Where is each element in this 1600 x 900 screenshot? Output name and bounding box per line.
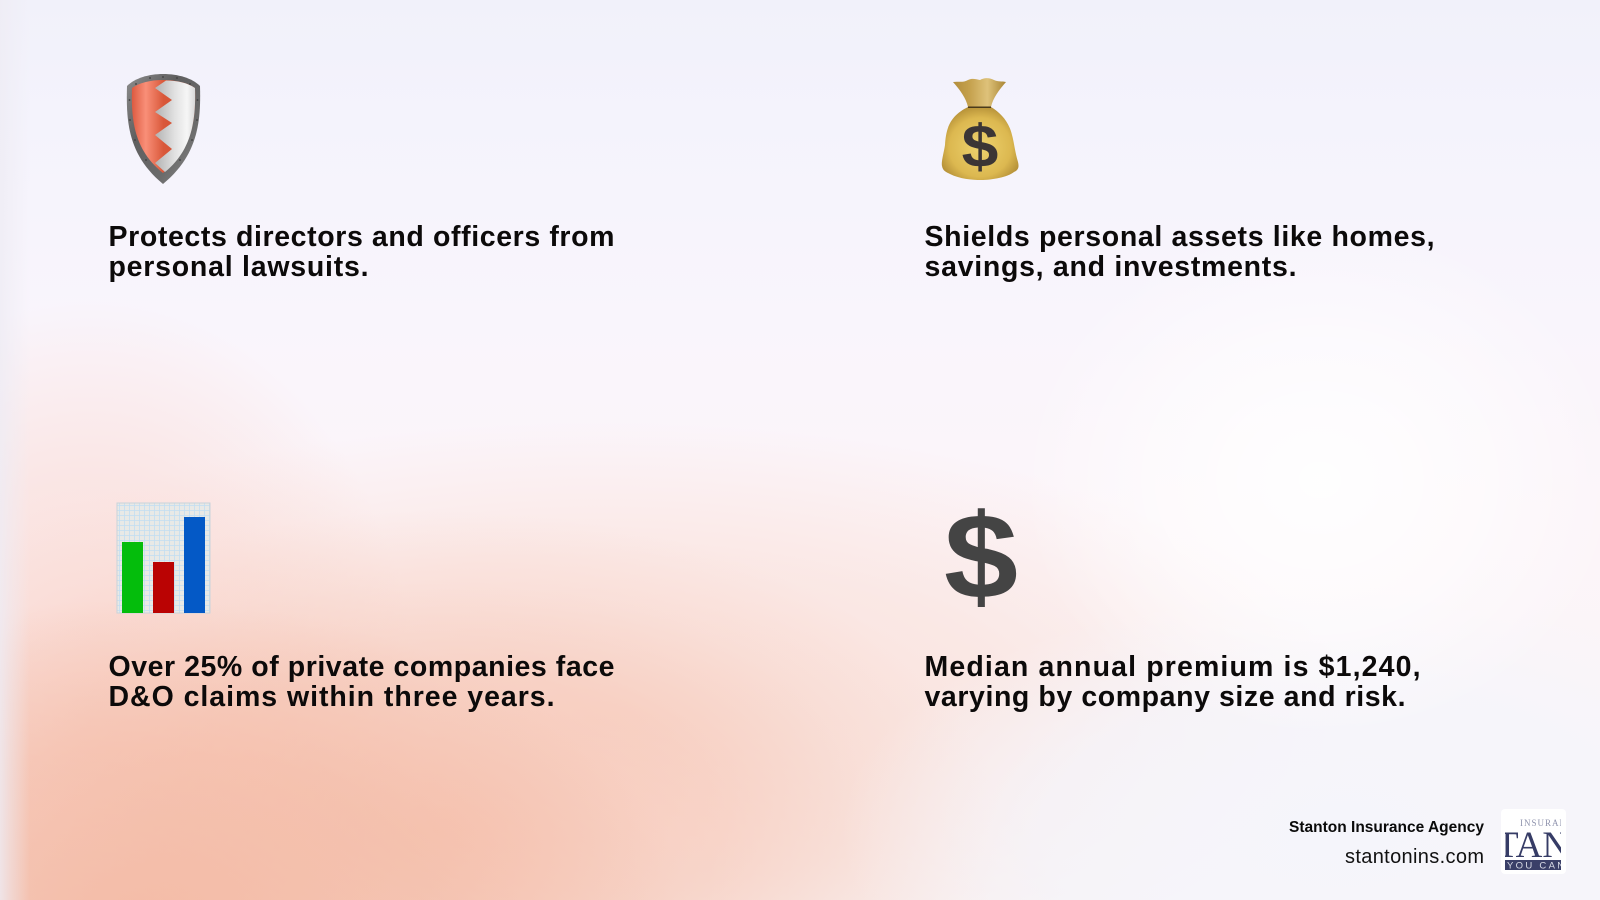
icon: dollar sign: $	[944, 489, 1018, 624]
text: claims: Over 25% of private companies face	[108, 651, 614, 683]
text: personal assets: Shields personal assets like homes,	[924, 221, 1434, 253]
icon: money bag	[942, 78, 1019, 180]
icon: bar chart	[117, 503, 210, 613]
text: protection	[108, 221, 614, 283]
text: personal assets	[924, 221, 1434, 283]
text: protection: Protects directors and officers from	[108, 221, 614, 253]
panel: protection	[108, 74, 614, 283]
logo: TAN	[1496, 825, 1569, 866]
logo: INSURANCE	[1520, 818, 1581, 828]
text: claims: D&O claims within three years.	[108, 681, 554, 713]
panel: premium	[924, 489, 1420, 713]
text: premium: Median annual premium is $1,240,	[924, 651, 1420, 683]
panel: personal assets	[924, 78, 1434, 283]
text: premium	[924, 651, 1420, 713]
agency name: Stanton Insurance Agency	[1289, 819, 1484, 836]
logo: YOU CAN	[1507, 860, 1566, 872]
logo	[1501, 809, 1566, 874]
text: premium: varying by company size and risk.	[924, 681, 1406, 713]
icon: money bag: $	[962, 114, 998, 180]
text: personal assets: savings, and investments.	[924, 251, 1296, 283]
text: protection: personal lawsuits.	[108, 251, 368, 283]
website: stantonins.com	[1345, 846, 1484, 868]
panel: claims	[108, 503, 614, 713]
icon: shield	[127, 74, 200, 184]
text: claims	[108, 651, 614, 713]
footer: brand	[1289, 809, 1581, 874]
